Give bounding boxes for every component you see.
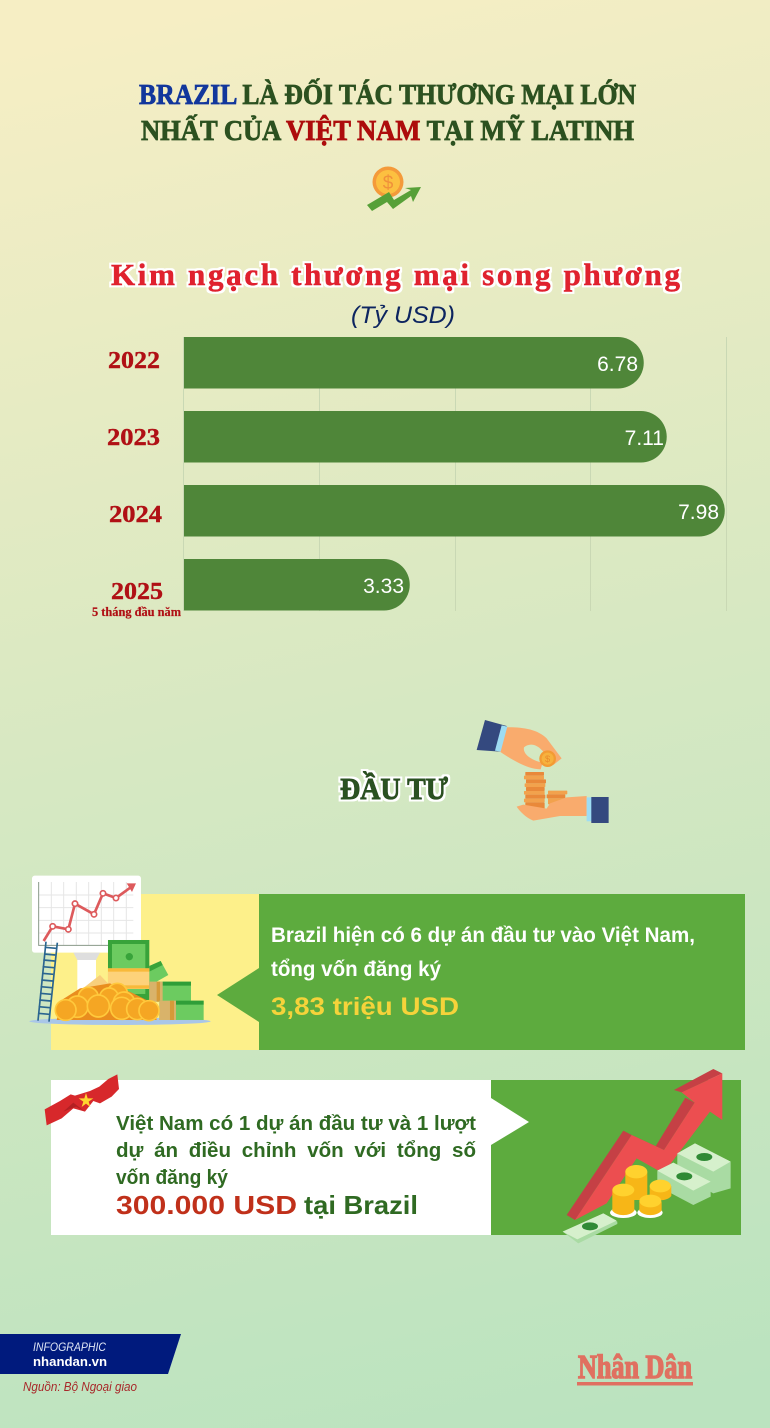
bar: 2023 [107, 411, 667, 462]
source line: Nguồn: Bộ Ngoại giao [23, 1380, 137, 1394]
panel text: Brazil hiện có 6 dự án đầu tư vào Việt Nam, [271, 924, 695, 947]
logo: Nhân Dân: Nhân Dân [578, 1349, 692, 1386]
panel text: dự án điều chỉnh vốn với tổng số [116, 1139, 476, 1162]
chart unit: (Tỷ USD) [351, 302, 455, 329]
bar: 2022: 6.78 [597, 353, 638, 376]
panel text: tổng vốn đăng ký [271, 958, 441, 981]
bar: 2024: 2024 [109, 502, 162, 528]
white text block [51, 1080, 529, 1235]
illustration: red arrow, coins and banknotes [563, 1069, 731, 1243]
title: BRAZIL LÀ ĐỐI TÁC THƯƠNG MẠI LỚN [139, 77, 636, 111]
bar chart [92, 337, 726, 619]
panel text: Việt Nam có 1 dự án đầu tư và 1 lượt [116, 1112, 476, 1135]
bar: 2024: 7.98 [678, 501, 719, 524]
panel text [116, 1112, 476, 1220]
bar: 2023: 2023 [107, 425, 160, 451]
chart heading: Kim ngạch thương mại song phương [111, 257, 680, 292]
icon: hands and coins: $ [545, 754, 551, 764]
title: NHẤT CỦA VIỆT NAM TẠI MỸ LATINH [141, 113, 634, 147]
footer: publisher tag [0, 1334, 181, 1374]
bar: 2025: 3.33 [363, 575, 404, 598]
icon: coin with rising arrow: $ [383, 173, 394, 194]
panel text: 300.000 USD [116, 1190, 297, 1220]
icon: Vietnam flag ribbon [45, 1074, 119, 1125]
publisher website: nhandan.vn [33, 1354, 107, 1369]
title [139, 77, 636, 147]
bar: 2025 [92, 559, 410, 619]
panel text: tại Brazil [304, 1190, 418, 1220]
yellow background [51, 894, 259, 1050]
section heading: investment: ĐẦU TƯ [340, 770, 448, 806]
bar: 2025: 2025 [111, 579, 163, 605]
green text block [217, 894, 745, 1050]
panel text [271, 924, 695, 1021]
bar: 2025: 5 tháng đầu năm [92, 605, 182, 619]
bar: 2022 [108, 337, 644, 388]
panel: Brazil investment in Vietnam [29, 876, 745, 1050]
green background [491, 1080, 741, 1235]
panel: Vietnam investment in Brazil [45, 1069, 741, 1243]
icon: coin with rising arrow [367, 166, 421, 211]
icon: hands and coins [477, 720, 609, 823]
bar: 2023: 7.11 [625, 427, 664, 450]
publisher label: INFOGRAPHIC [33, 1340, 106, 1354]
panel text: vốn đăng ký [116, 1167, 229, 1189]
bar: 2022: 2022 [108, 348, 160, 374]
bar: 2024 [109, 485, 725, 536]
illustration: chart and money [29, 876, 211, 1025]
panel text: 3,83 triệu USD [271, 993, 459, 1021]
